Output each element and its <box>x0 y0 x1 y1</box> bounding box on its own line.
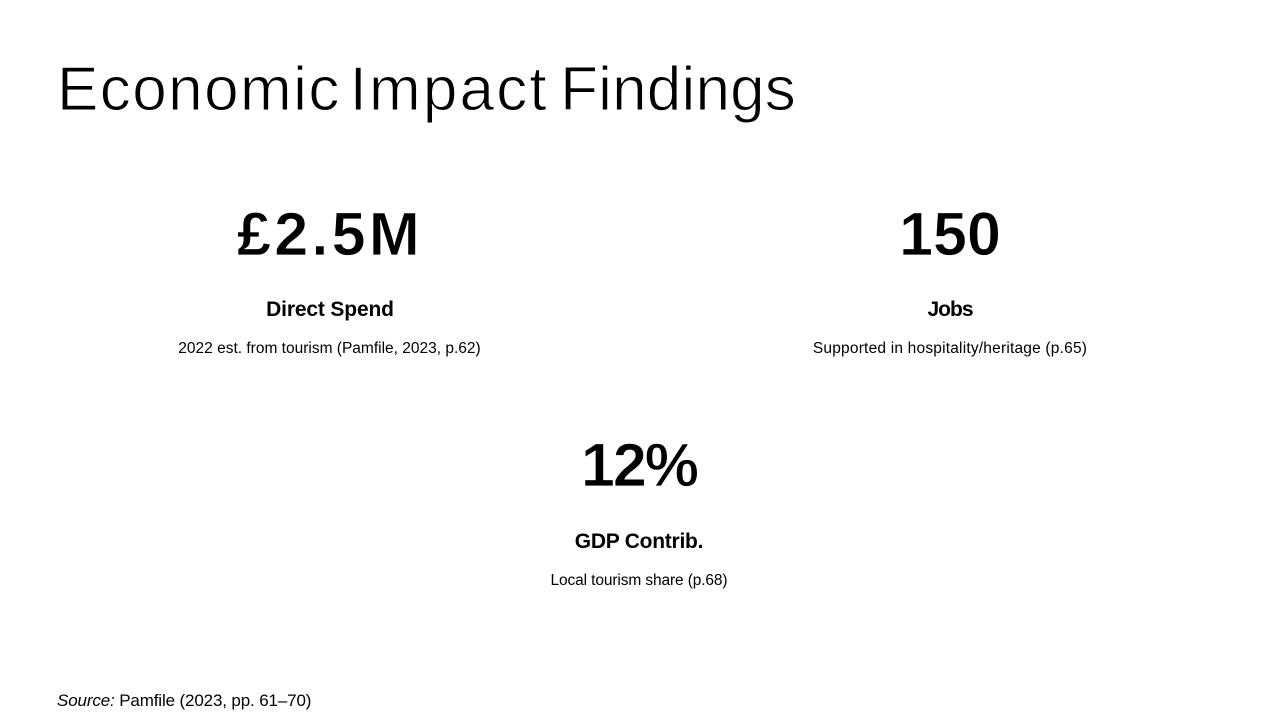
jobs note: Supported in hospitality/heritage (p.65) <box>813 340 1087 357</box>
gdp label: GDP Contrib. <box>575 530 703 553</box>
title: Economic Impact Findings <box>57 54 796 124</box>
gdp note: Local tourism share (p.68) <box>551 572 727 589</box>
stat: direct spend <box>178 200 481 357</box>
stat: gdp contribution <box>551 431 727 589</box>
direct spend label: Direct Spend <box>266 298 394 321</box>
direct spend note: 2022 est. from tourism (Pamfile, 2023, p.62) <box>178 340 481 357</box>
gdp value: 12% <box>581 431 697 499</box>
stat: jobs <box>813 200 1087 357</box>
source note: Source: Pamfile (2023, pp. 61–70) <box>57 691 311 710</box>
jobs value: 150 <box>899 200 1001 268</box>
jobs label: Jobs <box>927 298 972 321</box>
direct spend value: £2.5M <box>237 200 423 268</box>
